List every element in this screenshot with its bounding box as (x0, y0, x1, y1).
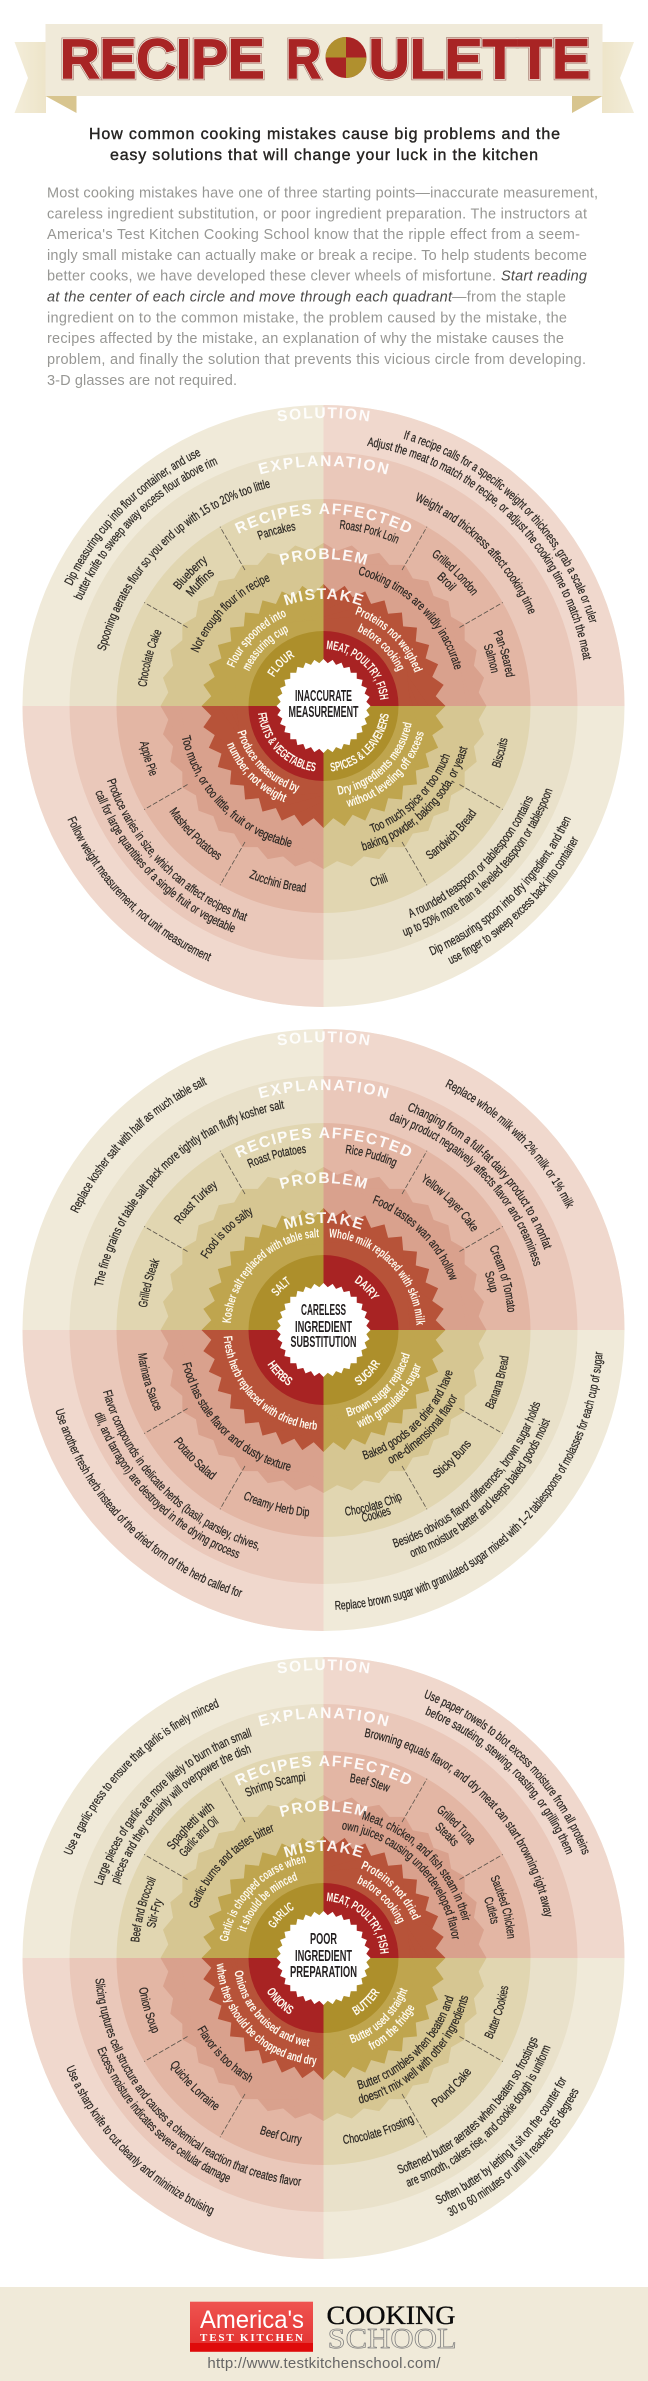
explanation text: dairy product negatively affects flavor and creaminess (383, 1090, 564, 1272)
recipes affected: Grilled Steak (134, 1256, 163, 1310)
center label: PREPARATION (290, 1964, 357, 1981)
recipes affected: Cookies (360, 1503, 393, 1526)
mistake text: Butter used straight (344, 1981, 417, 2053)
title banner: ULETTE (369, 27, 590, 90)
ring headings: EXPLANATION (257, 1705, 390, 1730)
ring headings: RECIPES AFFECTED (234, 503, 412, 534)
quadrant: herbs (29, 1329, 324, 1624)
recipes affected: Muffins (186, 570, 214, 597)
ring headings: MISTAKE (284, 588, 364, 606)
title banner: RECIPE (60, 27, 264, 90)
recipes affected: Pan-Seared (494, 630, 516, 678)
intro paragraph: America's Test Kitchen Cooking School know that the ripple effect from a seem- (47, 227, 580, 243)
center label: SUBSTITUTION (290, 1334, 356, 1351)
logo: Cooking School (326, 2300, 457, 2355)
recipes affected: Roast Turkey (170, 1176, 222, 1228)
mistake text: without leveling off excess (339, 724, 438, 821)
recipes affected (134, 1985, 304, 2148)
title banner: RECIPE (60, 27, 264, 90)
recipes affected: Sandwich Bread (422, 805, 481, 865)
logo: America's Test Kitchen (190, 2302, 313, 2352)
recipes affected: Quiche Lorraine (165, 2056, 224, 2116)
quadrant: onions (49, 1956, 324, 2232)
recipes affected: Chili (368, 871, 390, 890)
solution text: Follow weight measurement, not unit measurement (68, 816, 212, 962)
recipes affected: Beef and Broccoli (125, 1874, 159, 1945)
staple ingredient: HERBS (263, 1356, 297, 1390)
solution text: Replace kosher salt with half as much table salt (56, 1062, 212, 1218)
quadrant: flour (64, 450, 296, 686)
recipes affected: Salmon (484, 644, 498, 674)
recipes affected: Cream of Tomato (486, 1242, 522, 1315)
mistake text: number, not weight (227, 742, 287, 802)
logo: Cooking School: SCHOOL (328, 2324, 457, 2355)
quadrant: spices and leaveners (330, 714, 578, 964)
problem text: Too much spice or too much (364, 748, 461, 844)
ring headings: RECIPES AFFECTED (233, 1753, 414, 1790)
explanation text: are smooth, cakes rise, and cookie dough is uniform (400, 2039, 569, 2205)
recipes affected: Sautéed Chicken (487, 1872, 521, 1942)
solution text: Dip measuring spoon into dry ingredient, and then (428, 816, 571, 956)
explanation text: Produce varies in size, which can affect recipes that (107, 778, 248, 922)
recipes affected: Grilled London (432, 550, 477, 596)
wheel rings and quadrants (22, 1657, 624, 2259)
mistake text: Proteins not weighed (355, 606, 423, 673)
intro paragraph: at the center of each circle and move through each quadrant (47, 290, 453, 306)
intro paragraph: problem, and finally the solution that prevents this vicious circle from developing. (47, 352, 586, 368)
recipes affected (340, 1983, 513, 2151)
intro paragraph: careless ingredient substitution, or poor ingredient preparation. The instructors at (47, 206, 587, 222)
problem text: Food tastes wan and hollow (367, 1184, 470, 1287)
mistake text: Garlic is chopped coarse when (203, 1838, 313, 1948)
explanation text: dill, and tarragon) are destroyed in the drying process (76, 1406, 246, 1577)
mistake text: Kosher salt replaced with table salt (202, 1207, 326, 1330)
explanation text (55, 1971, 308, 2226)
wheel rings and quadrants (22, 405, 624, 1007)
solution text: use finger to sweep excess back into container (448, 836, 578, 964)
mistake text: Onions are bruised and wet (219, 1964, 317, 2063)
ring headings: PROBLEM (278, 1170, 369, 1193)
recipes affected: Mashed Potatoes (169, 806, 222, 860)
problem text: baking powder, baking soda, or yeast (355, 740, 484, 867)
explanation text: Weight and thickness affect cooking time (416, 492, 535, 614)
mistake text: Brown sugar replaced (340, 1347, 421, 1428)
explanation text: Softened butter aerates when beaten so frostings (391, 2031, 556, 2193)
recipes affected: Spaghetti with (162, 1798, 218, 1854)
ring headings: SOLUTION (276, 1657, 371, 1678)
mistake text: Produce measured by (238, 730, 300, 794)
title banner: R (286, 27, 321, 90)
subtitle: How common cooking mistakes cause big problems and the (89, 126, 560, 143)
explanation text: Excess moisture indicates severe cellular damage (81, 2041, 236, 2199)
solution text: Soften butter by letting it sit on the counter for (430, 2071, 580, 2218)
staple ingredient: ONIONS (262, 1983, 298, 2019)
intro paragraph (47, 186, 598, 389)
ring headings: RECIPES AFFECTED (233, 1125, 414, 1162)
problem text: Garlic burns and tastes bitter (177, 1812, 280, 1914)
solution text: Replace brown sugar with granulated sugar mixed with 1–2 tablespoons of molasses for each cup of sugar (328, 1345, 648, 1664)
logo: America's Test Kitchen: America's (200, 2306, 304, 2334)
mistake text: it should be minced (228, 1863, 303, 1938)
ring headings: EXPLANATION (257, 1077, 390, 1102)
mistake text: Fresh herb replaced with dried herb (203, 1329, 324, 1451)
subtitle: easy solutions that will change your luck in the kitchen (110, 147, 538, 164)
recipes affected: Soup (482, 1269, 501, 1294)
recipes affected: Rice Pudding (343, 1140, 400, 1170)
solution text: butter knife to sweep away excess flour above rim (73, 458, 218, 600)
explanation text: Large pieces of garlic are more likely to burn than small (73, 1707, 258, 1891)
recipes affected (348, 1770, 521, 1942)
problem text: own juices causing underdeveloped flavor (335, 1798, 483, 1946)
intro paragraph: Start reading (501, 269, 587, 285)
ring headings (234, 1031, 412, 1230)
staple ingredient: SPICES & LEAVENERS (323, 707, 402, 785)
solution text: Use paper towels to blot excess moisture from all proteins (418, 1670, 610, 1860)
recipes affected: Chocolate Cake (138, 630, 162, 686)
wheel 3: poor ingredient preparation (22, 1657, 624, 2259)
ring headings: PROBLEM (278, 1798, 369, 1821)
subtitle (89, 126, 560, 164)
center label: INGREDIENT (295, 1948, 352, 1965)
mistake text: from the fridge (364, 1999, 421, 2056)
recipes affected: Pancakes (257, 524, 296, 540)
website url: http://www.testkitchenschool.com/ (207, 2355, 441, 2372)
recipes affected: Grilled Tuna (433, 1801, 480, 1848)
intro paragraph: 3-D glasses are not required. (47, 373, 237, 389)
title banner: R (286, 27, 321, 90)
solution text: If a recipe calls for a specific weight or thickness, grab a scale or ruler (404, 430, 596, 622)
explanation text: pieces and they certainly will overpower the dish (92, 1726, 257, 1889)
mistake text: before cooking (352, 1869, 412, 1929)
explanation text: A rounded teaspoon or tablespoon contains (402, 790, 548, 933)
problem text: Too much, or too little, fruit or vegetable (182, 734, 292, 847)
mistake text: Whole milk replaced with skim milk (322, 1208, 446, 1332)
recipes affected: Creamy Herb Dip (241, 1488, 312, 1523)
quadrant: meat, poultry, fish (320, 1670, 610, 1961)
ring headings (233, 1657, 414, 1862)
problem text: Butter crumbles when beaten and (351, 1989, 469, 2105)
mistake text: measuring cup (243, 626, 288, 672)
explanation text: onto moisture better and keeps baked goods moist (404, 1412, 567, 1575)
recipes affected (343, 1140, 522, 1315)
explanation text: Changing from a full-fat dairy product to a nonfat (402, 1084, 571, 1255)
recipes affected: Shrimp Scampi (242, 1767, 308, 1800)
intro paragraph: —from the staple (452, 290, 566, 306)
quadrant: dairy (330, 1079, 574, 1326)
recipes affected: Marinara Sauce (133, 1350, 166, 1414)
recipes affected: Garlic and Oil (175, 1813, 222, 1861)
staple ingredient: GARLIC (264, 1898, 298, 1933)
recipes affected (138, 524, 296, 686)
wheel 1: inaccurate measurement (22, 405, 624, 1007)
intro paragraph: better cooks, we have developed these clever wheels of misfortune. (47, 269, 496, 285)
recipes affected: Sticky Buns (429, 1436, 475, 1482)
recipes affected (340, 520, 516, 678)
recipes affected: Broil (437, 572, 457, 592)
title banner: ULETTE (369, 27, 590, 90)
recipes affected: Pound Cake (428, 2064, 475, 2111)
intro paragraph: Most cooking mistakes have one of three starting points—inaccurate measurement, (47, 186, 598, 202)
solution text: Dip measuring cup into flour container, and use (64, 450, 200, 586)
recipes affected: Biscuits (489, 736, 511, 770)
quadrant: meat, poultry, fish (326, 430, 596, 700)
problem text: doesn't mix well with other ingredients (352, 1989, 486, 2122)
recipes affected: Butter Cookies (481, 1983, 513, 2041)
problem text: Not enough flour in recipe (190, 575, 270, 653)
ring headings (234, 407, 412, 606)
staple ingredient: MEAT, POULTRY, FISH (326, 640, 389, 700)
explanation text: Slicing ruptures cell structure and causes a chemical reaction that creates flavor (55, 1971, 308, 2226)
mistake text (340, 1347, 431, 1438)
recipes affected: Potato Salad (170, 1433, 220, 1484)
problem text: Flavor is too harsh (191, 2021, 258, 2089)
recipes affected: Blueberry (172, 556, 208, 590)
title banner (14, 24, 634, 113)
mistake text: with granulated sugar (350, 1357, 431, 1438)
problem text: one-dimensional flavor (382, 1389, 466, 1473)
quadrant: butter (340, 1981, 592, 2230)
explanation text: call for large quantities of a single fruit or vegetable (96, 790, 235, 932)
solution text: before sautéing, stewing, roasting, or grilling them (420, 1690, 591, 1860)
recipes affected (342, 1353, 514, 1526)
recipes affected: Roast Pork Loin (340, 520, 399, 544)
staple ingredient: FRUITS & VEGETABLES (258, 712, 316, 772)
explanation text: Besides obvious flavor differences, brown sugar holds (387, 1395, 561, 1568)
quadrant: salt (70, 1077, 320, 1323)
ring headings: EXPLANATION (258, 455, 389, 474)
center label (290, 1302, 356, 1351)
center label: POOR (310, 1931, 337, 1948)
solution text: Replace whole milk with 2% milk or 1% milk (440, 1066, 588, 1214)
quadrant: fruits and vegetables (68, 712, 316, 962)
recipes affected (138, 742, 306, 892)
quadrant: sugar (328, 1345, 648, 1664)
recipes affected: Cutlets (481, 1895, 502, 1926)
intro paragraph: ingly small mistake can actually make or break a recipe. To help students become (47, 248, 587, 264)
problem text: Baked goods are drier and have (356, 1364, 467, 1474)
explanation text: The fine grains of table salt pack more tightly than fluffy kosher salt (63, 1068, 291, 1293)
ring headings: MISTAKE (282, 1838, 365, 1862)
wheel 2: careless ingredient substitution (22, 1029, 624, 1631)
center label: CARELESS (301, 1302, 346, 1319)
staple ingredient: BUTTER (348, 1984, 384, 2020)
center label: INGREDIENT (295, 1319, 352, 1336)
problem text: Meat, chicken, and fish steam in their (356, 1794, 488, 1927)
intro paragraph: ingredient on to the common mistake, the problem caused by the mistake, the (47, 310, 567, 326)
staple ingredient: FLOUR (267, 650, 295, 677)
footer band (0, 2287, 648, 2381)
title banner: R (286, 27, 321, 90)
ring headings: PROBLEM (280, 548, 368, 565)
problem text: Food has stale flavor and dusty texture (164, 1356, 298, 1490)
recipes affected: Apple Pie (138, 742, 157, 776)
problem text: Cooking times are wildly inaccurate (359, 566, 461, 670)
recipes affected (133, 1350, 312, 1523)
explanation text: Browning equals flavor, and dry meat can start browning right away (358, 1696, 586, 1924)
staple ingredient: SALT (268, 1273, 295, 1300)
mistake text: Flour spooned into (226, 610, 286, 668)
mistake text (344, 1981, 421, 2056)
staple ingredient: DAIRY (350, 1272, 383, 1305)
recipes affected: Stir-Fry (144, 1896, 166, 1930)
explanation text: up to 50% more than a leveled teaspoon or tablespoon (396, 782, 572, 956)
center label (288, 688, 359, 721)
recipes affected: Yellow Layer Cake (417, 1169, 484, 1236)
mistake text: when they should be chopped and dry (194, 1956, 324, 2087)
title banner: ULETTE (369, 27, 590, 90)
mistake text: before cooking (358, 623, 404, 672)
solution text: Use a garlic press to ensure that garlic is finely minced (46, 1681, 225, 1861)
mistake text (194, 1956, 324, 2087)
ring headings: SOLUTION (276, 1029, 371, 1050)
recipes affected: Roast Potatoes (245, 1139, 309, 1171)
logo: Cooking School: COOKING (326, 2300, 456, 2330)
ring headings: MISTAKE (282, 1210, 365, 1234)
mistake text: Proteins not dried (356, 1853, 429, 1925)
center label (290, 1931, 357, 1981)
explanation text: Flavor compounds in delicate herbs (basil, parsley, chives, (79, 1384, 267, 1573)
recipes affected: Chocolate Frosting (340, 2111, 417, 2151)
logo: America's Test Kitchen: TEST KITCHEN (200, 2332, 303, 2344)
ring headings: SOLUTION (278, 407, 370, 422)
explanation text: Spooning aerates flour so you end up with 15 to 20% too little (97, 480, 270, 650)
recipes affected: Steaks (432, 1819, 462, 1850)
quadrant: garlic (46, 1681, 313, 1948)
recipes affected: Chocolate Chip (342, 1489, 405, 1521)
problem text: Food is too salty (195, 1201, 258, 1263)
title banner: RECIPE (60, 27, 264, 90)
recipes affected: Beef Curry (258, 2123, 304, 2148)
staple ingredient: SUGAR (350, 1355, 384, 1390)
intro paragraph: recipes affected by the mistake, an explanation of why the mistake causes the (47, 331, 564, 347)
center label: MEASUREMENT (288, 704, 359, 721)
recipes affected (370, 738, 508, 886)
solution text: Adjust the meat to match the recipe, or adjust the cooking time to match the meat (366, 438, 592, 660)
staple ingredient: MEAT, POULTRY, FISH (320, 1878, 403, 1961)
recipes affected (138, 1146, 306, 1307)
solution text: Use another fresh herb instead of the dried form of the herb called for (29, 1402, 248, 1624)
mistake text: Dry ingredients measured (331, 716, 426, 810)
solution text: Use a sharp knife to cut cleanly and minimize bruising (49, 2060, 220, 2232)
problem text (335, 1794, 488, 1946)
recipes affected: Beef Stew (348, 1770, 393, 1795)
recipes affected: Onion Soup (134, 1985, 163, 2036)
center label: INACCURATE (295, 688, 352, 705)
solution text: 30 to 60 minutes or until it reaches 65 degrees (442, 2083, 592, 2230)
recipes affected: Zucchini Bread (249, 870, 306, 892)
recipes affected: Banana Bread (482, 1353, 514, 1412)
recipes affected (125, 1767, 308, 1945)
wheel rings and quadrants (22, 1029, 624, 1631)
